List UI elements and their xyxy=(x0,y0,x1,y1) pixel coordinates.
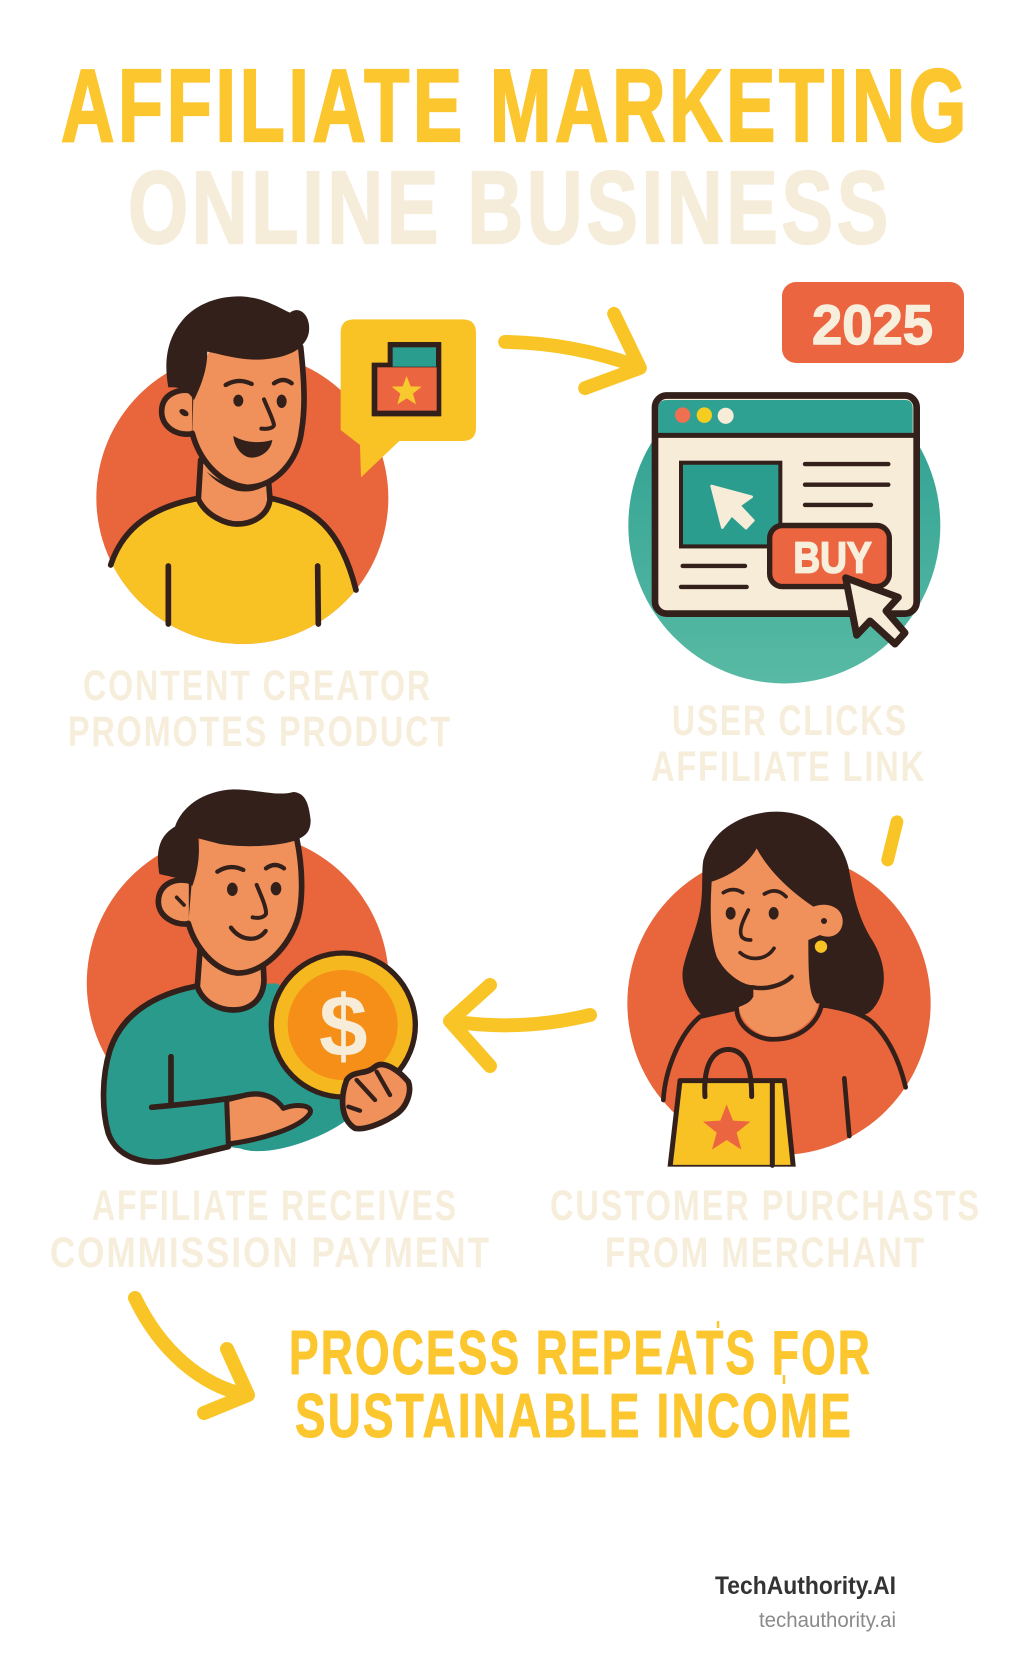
right hand xyxy=(343,1065,410,1129)
earring xyxy=(814,940,828,954)
eyes xyxy=(726,907,779,920)
buy button xyxy=(770,525,889,587)
arrow: creator to website xyxy=(505,314,640,388)
jaw outline xyxy=(188,838,302,973)
closing message xyxy=(289,1319,872,1451)
nose xyxy=(261,399,274,429)
caption: user clicks xyxy=(651,697,926,791)
circle background xyxy=(96,352,388,644)
coin: $ xyxy=(319,977,368,1075)
illustration: browser window with buy button xyxy=(628,368,940,683)
face and neck xyxy=(711,848,843,1037)
illustration: content creator with speech bubble xyxy=(96,296,476,644)
hair xyxy=(158,789,311,886)
badge: 2025 xyxy=(782,282,964,363)
eyebrows xyxy=(723,890,786,897)
caption: content creator xyxy=(68,662,452,756)
footer url: techauthority.ai xyxy=(759,1609,896,1632)
browser window xyxy=(655,396,917,614)
left hand xyxy=(227,1094,310,1144)
arrow: repeat xyxy=(135,1298,248,1413)
inner ear xyxy=(177,897,184,905)
eyes xyxy=(233,395,287,408)
shirt xyxy=(113,502,354,644)
eyebrows xyxy=(217,865,284,872)
face xyxy=(188,838,301,972)
caption: user clicks: USER CLICKS xyxy=(672,697,908,745)
folder icon xyxy=(372,343,441,416)
jaw outline xyxy=(192,347,304,487)
caption: user clicks: AFFILIATE LINK xyxy=(651,743,926,791)
arrow: customer to affiliate xyxy=(450,985,590,1066)
ear xyxy=(162,390,195,434)
image box xyxy=(681,463,780,546)
inner ear xyxy=(178,408,190,418)
hair xyxy=(166,296,309,400)
mouth xyxy=(740,948,774,958)
caption: customer purchases xyxy=(550,1182,981,1277)
sweater outline xyxy=(104,986,280,1162)
badge: 2025: 2025 xyxy=(812,293,933,356)
mouth xyxy=(231,928,266,939)
circle background xyxy=(87,832,388,1103)
neck xyxy=(198,460,270,524)
footer brand: TechAuthority.AI xyxy=(715,1572,896,1600)
coin xyxy=(271,953,415,1097)
window dots xyxy=(675,407,734,424)
caption: affiliate receives: COMMISSION PAYMENT xyxy=(50,1229,491,1277)
title bar xyxy=(658,400,913,433)
caption: affiliate receives: AFFILIATE RECEIVES xyxy=(92,1182,458,1230)
face xyxy=(192,345,304,487)
text lines xyxy=(681,464,888,587)
teal circle xyxy=(628,442,940,684)
chin shadow xyxy=(207,472,270,492)
large cursor xyxy=(846,578,905,644)
caption: content creator: CONTENT CREATOR xyxy=(83,662,432,710)
eyes xyxy=(227,882,281,896)
small cursor xyxy=(712,486,753,528)
shopping bag xyxy=(663,1049,800,1177)
mouth xyxy=(233,436,272,458)
nose xyxy=(253,885,266,918)
sweater xyxy=(104,983,360,1162)
illustration: customer with shopping bag xyxy=(627,812,931,1177)
title bar divider xyxy=(657,428,915,443)
hair xyxy=(682,812,884,1015)
nose xyxy=(741,910,751,940)
shirt outline xyxy=(663,1005,906,1136)
illustration: affiliate receiving coin xyxy=(87,789,415,1162)
caption: content creator: PROMOTES PRODUCT xyxy=(68,708,452,756)
ear xyxy=(158,880,192,924)
ear dot xyxy=(821,918,827,924)
caption: affiliate receives xyxy=(50,1182,491,1277)
eyebrows xyxy=(226,380,292,385)
neck xyxy=(197,950,264,1010)
arrow fragment xyxy=(888,822,897,860)
buy button: BUY xyxy=(793,535,872,583)
shirt outline xyxy=(111,498,356,624)
jaw line xyxy=(753,977,792,988)
speech bubble xyxy=(341,319,476,477)
circle background xyxy=(627,852,931,1155)
caption: customer purchases: FROM MERCHANT xyxy=(605,1229,926,1277)
